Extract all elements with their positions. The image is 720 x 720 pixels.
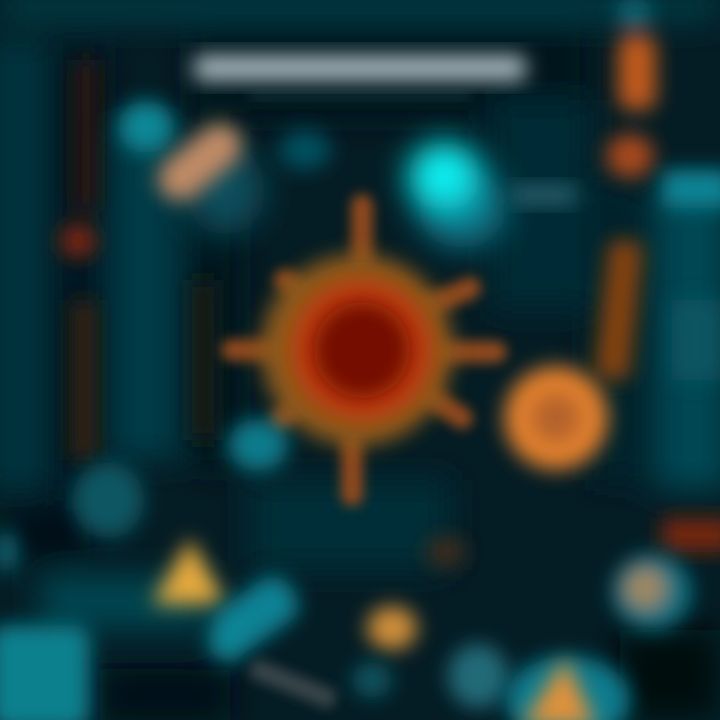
bottom teal blob with orange icon: [448, 644, 630, 720]
right orange column: [595, 0, 656, 381]
icon: bright cyan shape: [408, 142, 506, 248]
orange ring icon: [504, 366, 608, 470]
subtitle: [250, 92, 470, 99]
lower right teal icon: [612, 554, 692, 630]
virus outer ring: [261, 254, 453, 446]
small teal dot bottom center: [352, 662, 392, 698]
lower right red bar: [662, 518, 720, 552]
teal cross shape: [204, 569, 306, 662]
small teal blob: [279, 130, 331, 170]
virus core: [314, 302, 410, 398]
small orange dot: [367, 606, 417, 650]
small dark red dot: [426, 536, 466, 568]
title: [194, 55, 526, 81]
virus spikes: [232, 205, 496, 495]
icon: yellow triangle: [152, 538, 226, 604]
grey bar lower center: [248, 658, 338, 710]
small label near cyan shape: [512, 186, 576, 204]
lower left teal icon: [0, 462, 144, 720]
teal blob center left: [228, 419, 288, 471]
right teal panel: [662, 170, 720, 380]
icon: cyan dot upper left: [118, 101, 174, 153]
central virus icon: [232, 205, 496, 495]
icon: pill: [149, 114, 265, 235]
left vertical bar: [60, 60, 214, 460]
virus inner ring: [290, 278, 434, 422]
